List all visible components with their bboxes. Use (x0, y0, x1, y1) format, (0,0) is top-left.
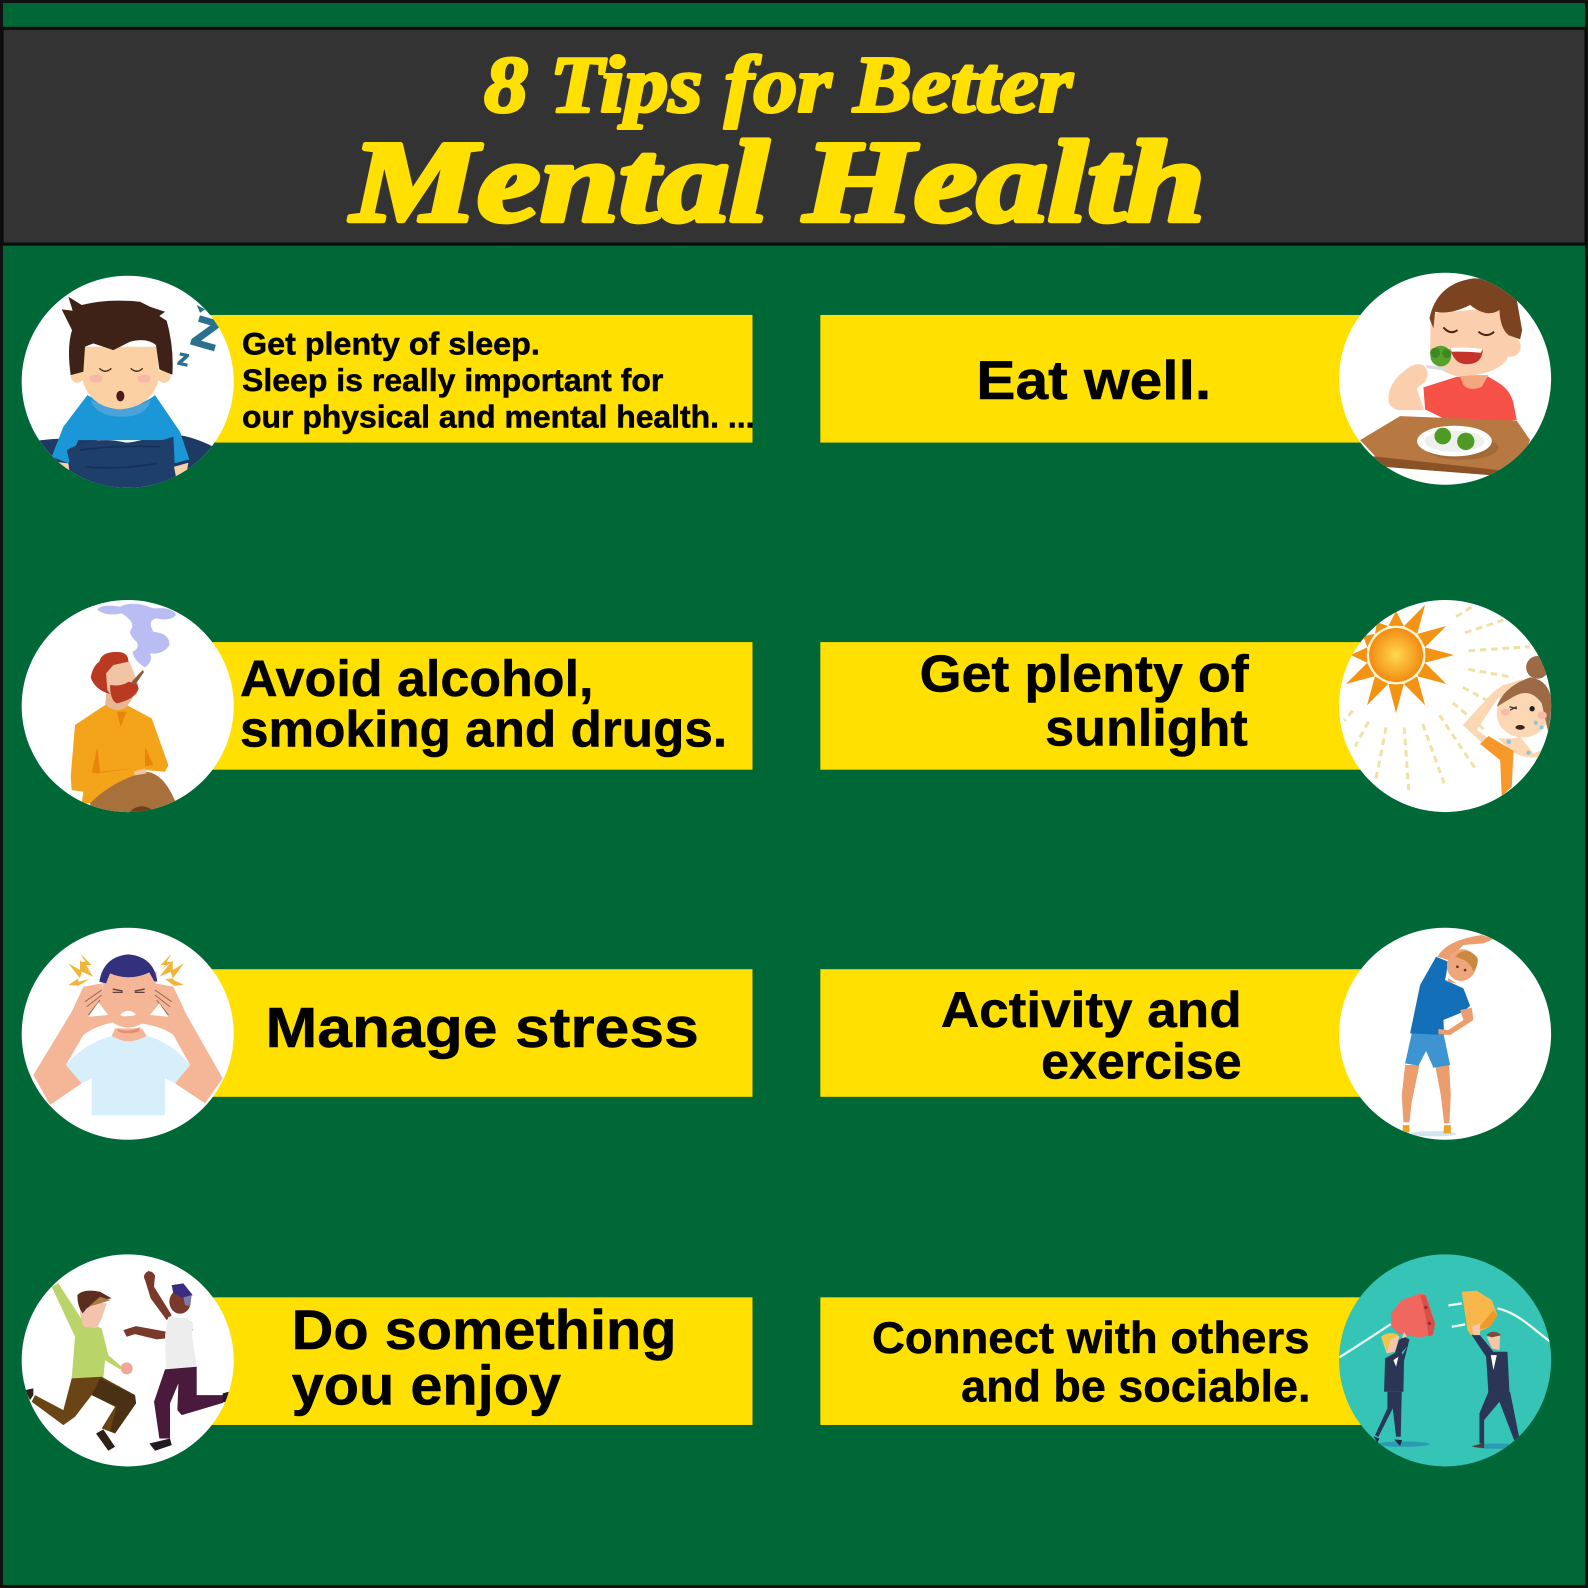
tip 4 text: sunlight (1045, 698, 1248, 756)
icon: two people dancing (22, 1254, 234, 1466)
tip 2 text: Eat well. (976, 349, 1211, 411)
tip 8 banner (820, 1297, 1367, 1425)
icon: sleeping boy (22, 276, 234, 493)
icon: sun and sweating woman (1339, 600, 1552, 812)
tip 2: eat well (820, 273, 1551, 485)
tip 5 text: Manage stress (265, 997, 699, 1060)
tip 5: manage stress (22, 928, 752, 1140)
title line 2: Mental Health (349, 118, 1205, 247)
tip 4 text: Get plenty of (920, 645, 1250, 703)
tip 3 text: smoking and drugs. (240, 700, 727, 757)
tip 2 banner (820, 315, 1367, 443)
tip 7 text: you enjoy (292, 1355, 561, 1417)
tip 6 banner (820, 969, 1367, 1097)
title line 1: 8 Tips for Better (484, 39, 1074, 129)
tip 1 text (242, 326, 755, 434)
tip 3 text (240, 650, 727, 757)
tip 7 text (292, 1299, 677, 1417)
tip 1 text: Sleep is really important for (242, 363, 663, 398)
tip 3: avoid alcohol (22, 600, 752, 820)
tip 1 banner (203, 315, 752, 443)
icon: man stretching (1339, 928, 1551, 1140)
tip 8 text (872, 1314, 1311, 1412)
icon: sleeping boy: z (176, 345, 192, 371)
tip 3 banner (203, 642, 752, 770)
tip 1: sleep (22, 276, 755, 493)
tip 6 text: Activity and (941, 982, 1242, 1038)
tip 7 text: Do something (292, 1299, 677, 1361)
icon: man smoking (22, 600, 234, 820)
tip 8 text: and be sociable. (961, 1363, 1311, 1412)
tip 8 text: Connect with others (872, 1314, 1309, 1363)
icon: stressed man (22, 928, 234, 1140)
icon: boy eating (1339, 273, 1551, 485)
tip 6: activity and exercise (820, 928, 1551, 1140)
tip 4 text (920, 645, 1250, 756)
header band (2, 28, 1586, 247)
tip 4 banner (820, 642, 1367, 770)
icon: two men with plug and socket (1339, 1254, 1551, 1466)
tip 7: do something you enjoy (22, 1254, 752, 1466)
tip 1 text: our physical and mental health. ... (242, 399, 755, 434)
tip 1 text: Get plenty of sleep. (242, 326, 540, 361)
tip 6 text: exercise (1041, 1034, 1242, 1090)
tip 7 banner (203, 1297, 752, 1425)
icon: sleeping boy: Z (188, 307, 225, 359)
tip 4: sunlight (820, 600, 1552, 812)
tip 3 text: Avoid alcohol, (240, 650, 593, 707)
tip 6 text (941, 982, 1242, 1090)
tip 8: connect with others (820, 1254, 1551, 1466)
tip 5 banner (203, 969, 752, 1097)
